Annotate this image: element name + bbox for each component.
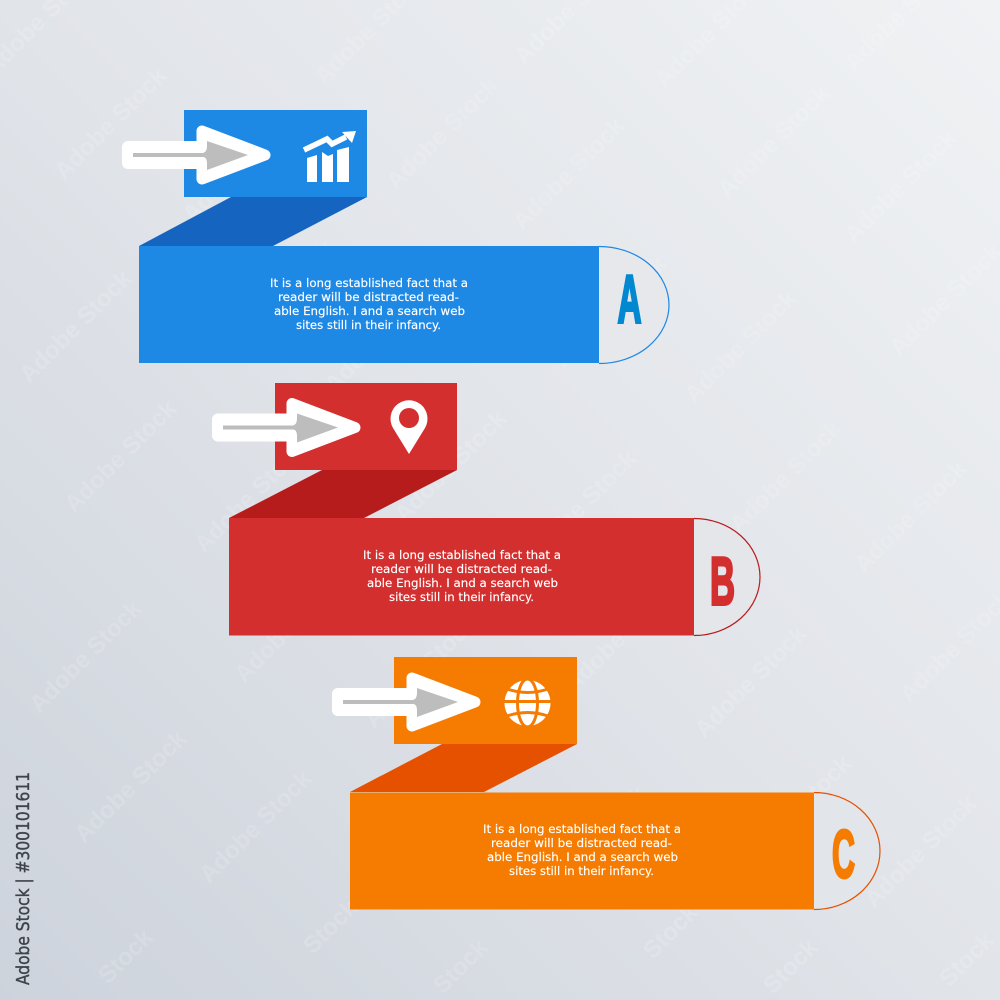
watermark pattern: Adobe Stock: [389, 405, 513, 528]
arrow C: [332, 678, 475, 726]
text block B: [363, 549, 561, 604]
main band C: [350, 792, 814, 910]
watermark pattern: Adobe Stock: [359, 610, 483, 733]
text block B: It is a long established fact that a: [363, 549, 561, 562]
watermark pattern: Stock: [428, 934, 494, 999]
watermark pattern: Stock: [298, 894, 364, 959]
icon: growth chart: [304, 131, 356, 182]
watermark pattern: Adobe Stock: [177, 105, 301, 228]
watermark pattern: Adobe Stock: [319, 275, 443, 398]
watermark pattern: Adobe Stock: [859, 790, 983, 913]
text block B: reader will be distracted read-: [371, 563, 552, 576]
watermark pattern: Adobe Stock: [59, 395, 183, 518]
main band B: [229, 518, 694, 636]
arrow A: [122, 131, 265, 179]
watermark pattern: Adobe Stock: [529, 780, 653, 903]
fold shadow B: [229, 470, 457, 518]
watermark pattern: Stock: [758, 934, 824, 999]
letter cap A: [599, 246, 669, 364]
stock id label: Adobe Stock | #300101611: [13, 772, 34, 985]
panel: section B: [212, 383, 760, 636]
letter cap B: [694, 518, 760, 636]
watermark pattern: [15, 127, 875, 985]
arrow B: [212, 404, 355, 452]
watermark pattern: Adobe Stock: [399, 735, 523, 858]
watermark pattern: Adobe Stock: [189, 435, 313, 558]
watermark pattern: Adobe Stock: [507, 112, 631, 235]
tab A: [184, 110, 367, 197]
watermark pattern: Adobe Stock: [229, 565, 353, 688]
text block C: [483, 823, 681, 878]
watermark pattern: Adobe Stock: [689, 620, 813, 743]
text block B: able English. I and a search web: [367, 577, 558, 590]
watermark pattern: Stock: [638, 899, 704, 964]
letter cap C: [814, 792, 880, 910]
main band A: [139, 246, 599, 363]
text block A: [270, 277, 468, 332]
watermark pattern: Adobe Stock: [381, 72, 505, 195]
letter B: B: [710, 544, 735, 620]
text block A: It is a long established fact that a: [270, 277, 468, 290]
watermark pattern: Adobe Stock: [69, 725, 193, 848]
text block A: able English. I and a search web: [274, 305, 465, 318]
text block C: It is a long established fact that a: [483, 823, 681, 836]
watermark pattern: Adobe Stock: [49, 62, 173, 185]
icon: map pin: [390, 400, 428, 454]
panel: section C: [332, 657, 880, 910]
text block A: reader will be distracted read-: [278, 291, 459, 304]
watermark pattern: Stock: [934, 927, 1000, 992]
watermark pattern: Adobe Stock: [14, 265, 138, 388]
panel: section A: [122, 110, 669, 364]
watermark pattern: Adobe Stock: [712, 80, 836, 203]
text block C: sites still in their infancy.: [509, 865, 654, 878]
watermark pattern: Stock: [93, 924, 159, 989]
text block C: reader will be distracted read-: [491, 837, 672, 850]
watermark pattern: Adobe Stock: [549, 250, 673, 373]
text block C: able English. I and a search web: [487, 851, 678, 864]
tab C: [394, 657, 577, 744]
watermark pattern: Adobe Stock: [194, 765, 318, 888]
watermark pattern: Adobe Stock: [849, 455, 973, 578]
watermark pattern: Adobe Stock: [839, 125, 963, 248]
watermark pattern: Adobe Stock: [734, 750, 858, 873]
tab B: [275, 383, 457, 470]
watermark pattern: Adobe Stock: [216, 235, 340, 358]
panel: section C: C: [832, 816, 855, 892]
watermark pattern: Adobe Stock: [724, 415, 848, 538]
watermark pattern: Adobe Stock: [519, 445, 643, 568]
fold shadow A: [139, 197, 367, 246]
watermark pattern: Adobe Stock: [559, 575, 683, 698]
text block B: sites still in their infancy.: [389, 591, 534, 604]
watermark pattern: Adobe Stock: [24, 595, 148, 718]
fold shadow C: [350, 744, 577, 792]
panel: section A: A: [618, 262, 642, 338]
watermark pattern: Adobe Stock: [679, 285, 803, 408]
icon: globe: [503, 679, 552, 727]
text block A: sites still in their infancy.: [296, 319, 441, 332]
